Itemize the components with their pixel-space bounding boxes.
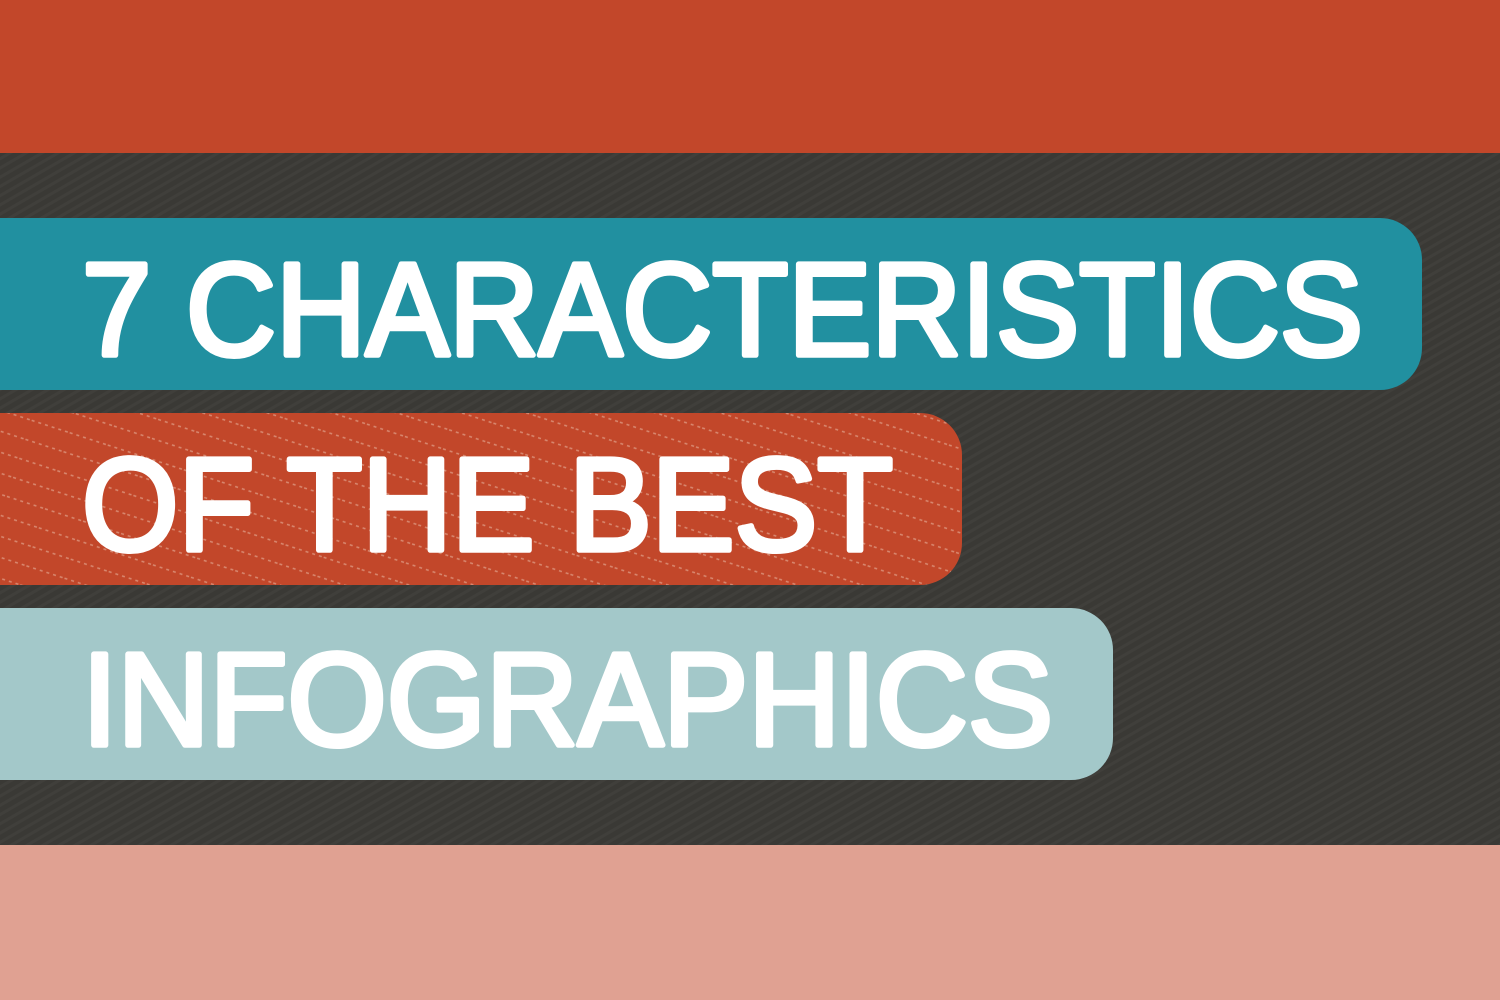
title banner 2: OF THE BEST bbox=[82, 431, 893, 578]
top band bbox=[0, 0, 1500, 153]
dark background band bbox=[0, 153, 1500, 845]
title banner 1: 7 CHARACTERISTICS bbox=[82, 236, 1363, 383]
title banner 3: INFOGRAPHICS bbox=[82, 626, 1053, 773]
bottom band bbox=[0, 845, 1500, 1000]
